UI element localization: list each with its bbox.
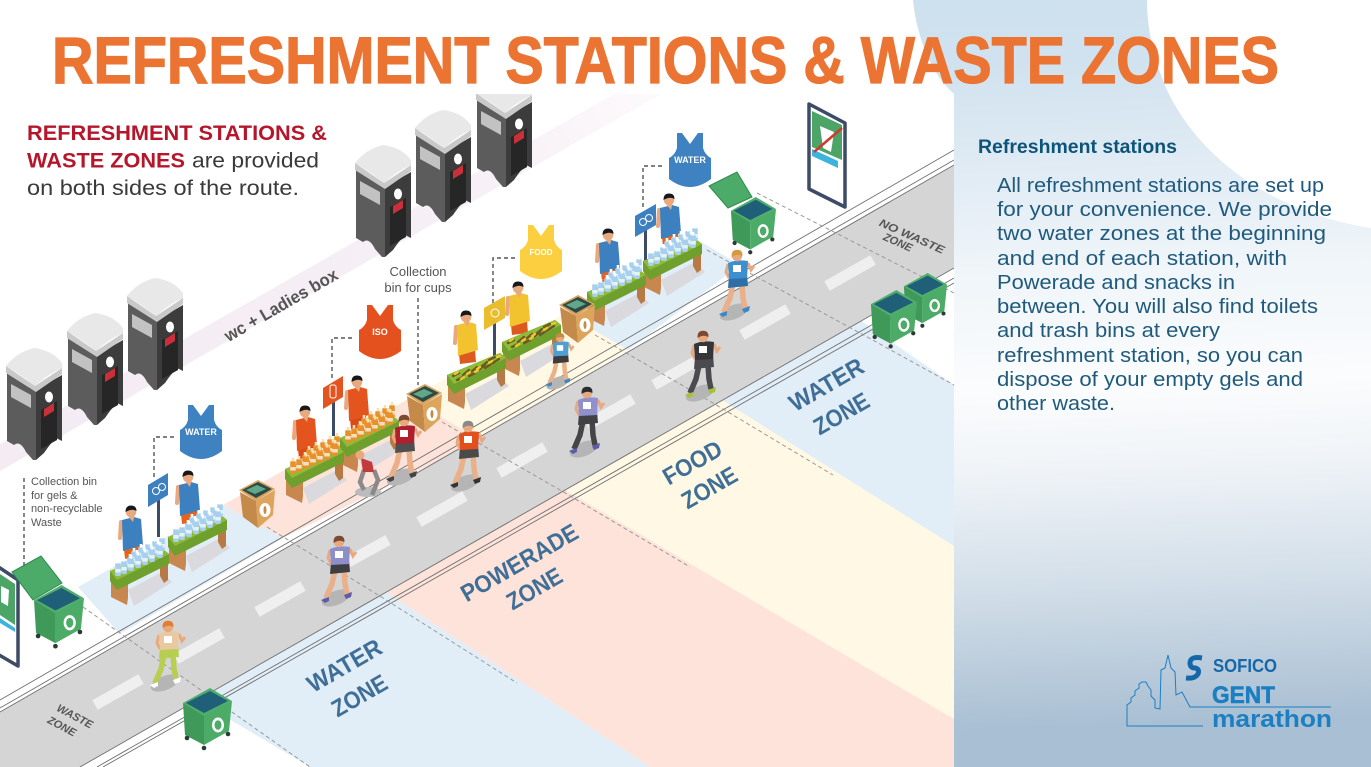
jersey tag: iso [359,305,401,359]
powerade station [285,376,402,504]
toilet strip [0,104,608,471]
jersey tag: water far: WATER [674,155,706,165]
waste zone sign [0,564,18,666]
collection bin note: cups: bin for cups [384,280,452,295]
icon: water sign [148,473,168,537]
jersey tag: food [520,225,562,279]
dashed zone boundaries [83,193,954,767]
intro text [27,126,326,195]
runner: grey haired man in orange [448,421,485,495]
collection bin note: gels: Collection bin [31,476,97,488]
zone label: water bottom: WATER [302,634,387,698]
intro text: REFRESHMENT STATIONS & [27,122,327,145]
side panel body text: Powerade and snacks in [997,271,1235,294]
logo: sofico gent marathon: GENT [1212,682,1275,709]
side panel body text: for your convenience. We provide [997,198,1332,221]
zone label: food: FOOD [658,436,727,491]
logo: sofico gent marathon: SOFICO [1213,656,1277,676]
zone label: powerade: POWERADE [456,519,583,608]
background: pale blue side panel [913,0,1371,767]
road label: waste zone [44,702,95,740]
jersey tag: food: FOOD [529,248,553,257]
side panel body text: dispose of your empty gels and [997,368,1303,391]
side panel body text: refreshment station, so you can [997,344,1303,367]
zone label: food [658,436,742,515]
green bin with lid, top [709,172,776,254]
side panel body text: and trash bins at every [997,319,1221,342]
pair of green bins right [871,273,947,349]
collection bin note: cups: Collection [389,264,447,279]
runner: purple top woman [567,387,604,461]
side panel body text: two water zones at the beginning [997,222,1326,245]
water station near [110,470,230,606]
runner: blue vest woman [544,333,574,392]
road label: no waste zone: NO WASTE [877,217,947,257]
zone label: water top [784,353,874,441]
zone label: food: ZONE [677,462,742,515]
side panel body text: and end of each station, with [997,247,1287,270]
zone label: water top: ZONE [809,388,874,441]
icon: powerade sign [323,376,343,436]
food station [447,282,564,410]
zones below the route [197,320,954,767]
icon: food sign [484,296,505,356]
side panel body text: between. You will also find toilets [997,295,1318,318]
side panel body text [997,174,1332,415]
road label: waste zone: ZONE [44,714,78,740]
side panel body text: other waste. [997,392,1115,415]
jersey tag: iso: ISO [372,327,388,337]
collection bin note: cups [385,266,452,294]
isometric route illustration [0,75,954,767]
road [0,150,954,767]
runner: man in red [384,415,421,489]
jersey tag: water far [669,133,711,187]
strip label: wc + Ladies box [220,264,342,346]
side panel body text: All refreshment stations are set up [997,174,1324,197]
water station far [587,194,705,327]
road label: waste zone: WASTE [54,702,95,732]
icon: water sign [635,204,656,261]
intro text: on both sides of the route. [27,176,299,200]
collection bin note: gels: Waste [31,517,62,529]
icon: sofico s [1186,658,1202,678]
jersey tag: water near [180,405,222,459]
jersey tag: water near: WATER [185,427,217,437]
collection bin note: gels: for gels & [31,490,78,502]
green bin with lid, left [12,556,84,649]
collection bin note: gels: non-recyclable [31,503,103,515]
toilets: wc + ladies box [6,75,532,460]
intro text: WASTE ZONES [27,150,185,172]
zones beside the stations [78,243,740,634]
runner: bending woman [355,450,381,497]
logo: sofico gent marathon: marathon [1212,706,1332,733]
intro text: are provided [192,148,319,172]
road label: no waste zone: ZONE [880,231,915,255]
no waste sign [809,104,845,207]
zone label: powerade: ZONE [502,563,567,616]
runner: woman in lime [148,621,185,695]
collection bin note: gels [31,476,103,529]
runners [148,250,754,695]
cup collection bins [239,295,595,528]
callout dashed leaders [24,166,664,575]
runner: dark woman [683,331,720,405]
runner: blue man [717,250,754,324]
zone label: water top: WATER [784,353,869,417]
side panel heading: Refreshment stations [978,137,1177,158]
road centre dashes [95,260,873,705]
icon: gent skyline [1127,655,1331,726]
green bin bottom [183,688,232,750]
runner: man in purple [319,536,356,610]
logo: sofico gent marathon [1127,655,1332,733]
zone label: water bottom [302,634,392,723]
zone label: water bottom: ZONE [327,670,392,723]
